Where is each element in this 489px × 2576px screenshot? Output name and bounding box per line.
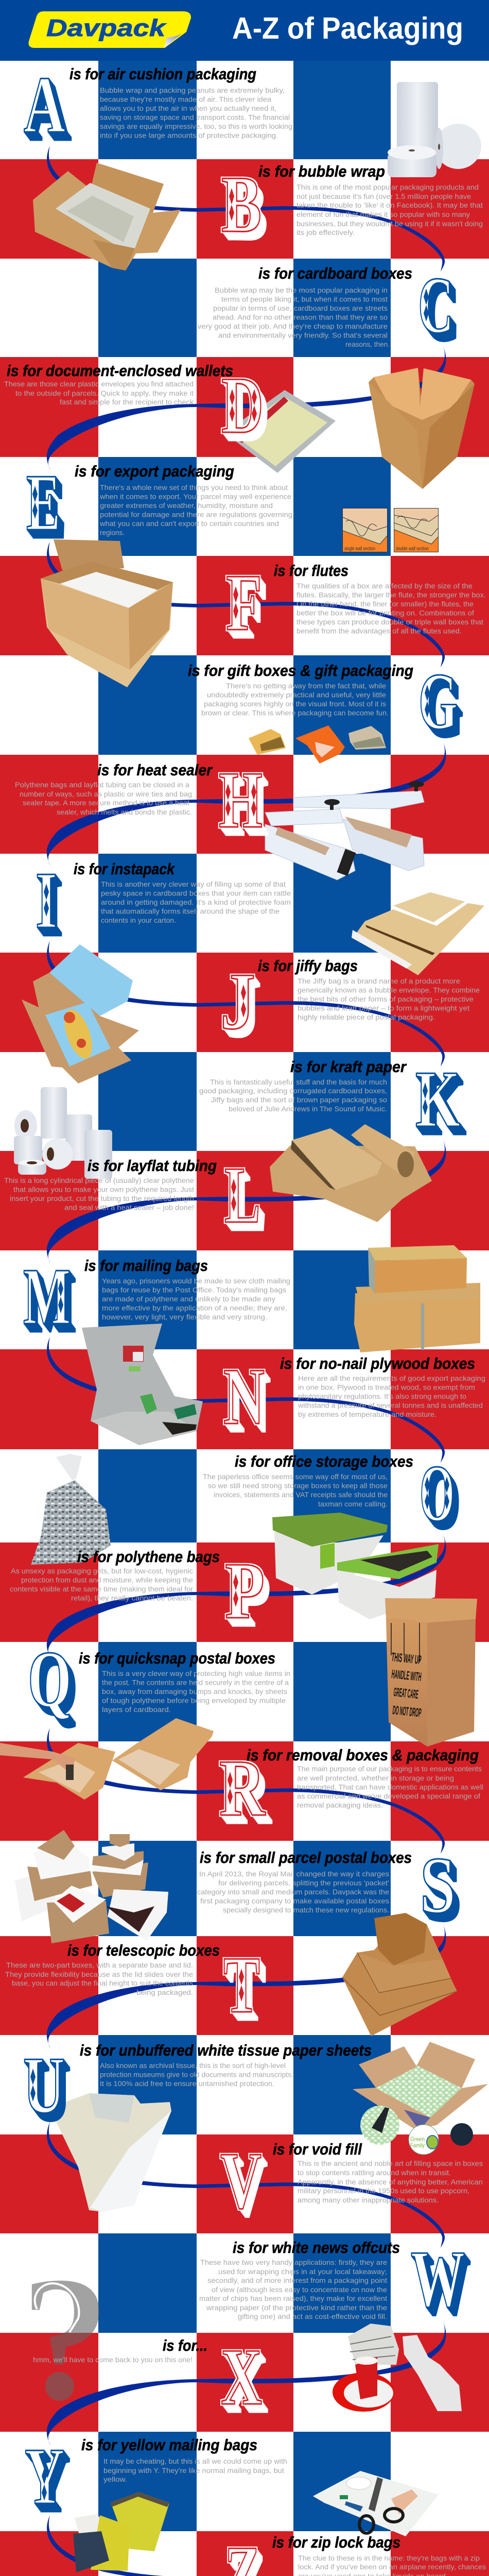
body text: to stop contents rattling around when in transit. xyxy=(298,2168,451,2177)
body text: that allows you to make your own polythene bags. Just xyxy=(13,1185,194,1193)
body text: protection museums give to old documents and manuscripts. xyxy=(100,2070,293,2078)
letter A: A xyxy=(24,60,65,149)
inset: bottle in peanuts xyxy=(360,2106,399,2145)
body text: protection from dust and moisture, while keeping the xyxy=(21,1575,193,1584)
body text: of view (although less easy to concentrate on now the xyxy=(212,2285,387,2294)
body text: good packaging, including corrugated cardboard boxes, xyxy=(199,1087,387,1095)
body text: bubbles and kraft paper – to form a lightweight yet xyxy=(298,1004,469,1012)
letter G: G xyxy=(418,656,458,746)
body text: into if you use large amounts of protective packaging. xyxy=(100,131,278,139)
section U: unbuffered white tissue paper xyxy=(23,2040,372,2212)
body text: hmm, we'll have to come back to you on this one! xyxy=(33,2355,193,2364)
body text: brown or clear. This is where packaging can become fun. xyxy=(201,709,389,717)
section Y: yellow mailing bags xyxy=(25,2431,287,2572)
body text: secondly, and of more interest from a packaging point xyxy=(207,2276,387,2284)
image: paper wads and red mug xyxy=(333,2324,462,2412)
body text: are well protected, whether in storage or being xyxy=(297,1774,454,1782)
body text xyxy=(101,880,291,924)
letter R: R xyxy=(219,1743,266,1833)
body text: beginning with Y. They're like normal mailing bags, but xyxy=(103,2466,284,2475)
body text: This is one of the most popular packaging products and xyxy=(296,183,479,191)
body text: saving on storage space and transport costs. The financial xyxy=(100,113,290,122)
letter L: L xyxy=(224,1150,260,1240)
letter L xyxy=(224,1150,260,1240)
body text: base, you can adjust the final height to suit the contents xyxy=(12,1979,193,1987)
body text xyxy=(201,682,389,717)
body text: Years ago, prisoners would be made to sew cloth mailing xyxy=(102,1277,290,1285)
image: heat sealers xyxy=(265,781,424,880)
body text: They provide flexibility because as the lid slides over the xyxy=(5,1970,193,1978)
body text: by extremes of temperature and moisture. xyxy=(298,1410,436,1418)
body text: This is a long cylindrical piece of (usually) clear polythene xyxy=(4,1176,194,1184)
body text: benefit from the advantages of all the flutes used. xyxy=(296,626,462,635)
body text xyxy=(103,2457,287,2483)
inset: dark circle xyxy=(450,2123,473,2146)
letter P: P xyxy=(225,1546,265,1635)
swoosh M to O xyxy=(47,1337,445,1463)
heading: is for heat sealer xyxy=(97,761,213,779)
logo: Davpack: Davpack xyxy=(46,14,167,41)
heading: is for office storage boxes xyxy=(235,1452,413,1470)
body text: This is fantastically useful stuff and the basis for much xyxy=(210,1078,387,1086)
image: document wallet xyxy=(224,390,336,473)
heading: is for quicksnap postal boxes xyxy=(79,1649,275,1667)
heading: is for small parcel postal boxes xyxy=(200,1849,412,1867)
body text xyxy=(296,183,483,236)
body text: more effective by the application of a needle; they are, xyxy=(102,1303,287,1312)
body text: what you can and can't export to certain countries and xyxy=(99,519,279,528)
body text: invoices, statements and VAT receipts safe should the xyxy=(214,1490,388,1499)
body text xyxy=(203,1472,388,1508)
heading: is for layflat tubing xyxy=(88,1157,217,1175)
body text: regions. xyxy=(100,529,125,537)
body text: gifting one) and act as cost-effective void fill. xyxy=(238,2312,387,2320)
body text: matter of chips has been raised), they make for excellent xyxy=(199,2294,387,2302)
inset: Green Family badge xyxy=(409,2125,439,2155)
body text: very good at their job. And they're cheap to manufacture xyxy=(198,322,388,330)
body text: undoubtedly extremely practical and useful, very little xyxy=(207,690,386,699)
section R: removal boxes and packaging xyxy=(0,1718,483,1833)
letter X: X xyxy=(221,2332,262,2421)
swoosh A to C xyxy=(47,146,445,272)
letter I xyxy=(36,855,57,945)
body text xyxy=(4,1176,194,1212)
body text: It is 100% acid free to ensure untarnished protection. xyxy=(100,2079,274,2088)
body text: and seal with a heat sealer – job done! xyxy=(64,1204,194,1212)
body text xyxy=(298,977,480,1021)
body text xyxy=(99,483,292,537)
image: kraft paper rolls xyxy=(270,1124,432,1222)
heading: is for air cushion packaging xyxy=(69,65,256,83)
body text: these types can produce double or triple wall boxes that xyxy=(296,618,483,626)
body text: the best bits of other forms of packaging – protective xyxy=(298,995,474,1003)
section W: white news offcuts xyxy=(199,2234,465,2412)
body text: terms of people liking it, but when it comes to most xyxy=(221,295,388,303)
section A: air cushion packaging xyxy=(24,60,292,270)
diagram: double wall section: double wall section xyxy=(396,546,429,552)
body text xyxy=(199,1078,387,1113)
body text: are made of polythene and unlikely to be made any xyxy=(102,1295,275,1303)
body text: withstand a pressure of several tonnes and is unaffected xyxy=(298,1401,483,1410)
letter M: M xyxy=(23,1251,71,1341)
section P: polythene bags xyxy=(10,1454,265,1635)
body text: element of fun that makes it so popular with so many xyxy=(296,210,470,218)
body text: sealer tape. A more secure method is to use a heat xyxy=(23,799,189,807)
body text xyxy=(198,286,390,348)
swoosh U to W xyxy=(47,2122,445,2248)
body text: removal packaging ideas. xyxy=(297,1801,383,1809)
body text: potential for damage and there are regulations governing xyxy=(100,510,292,518)
body text: ahead. And for no other reason than that they are so xyxy=(213,313,388,321)
section X xyxy=(21,2240,262,2437)
image: postal boxes with hand xyxy=(0,1718,214,1800)
body text: On the other hand, the finer (or smaller) the flutes, the xyxy=(296,600,474,608)
body text: contents visible at the same time (making them ideal for xyxy=(10,1585,193,1593)
body text: insert your product, cut the tubing to the required length xyxy=(10,1194,194,1202)
body text: used for wrapping chips in at your local takeaway; xyxy=(218,2267,387,2276)
body text: transported. That can have domestic applications as well xyxy=(297,1783,483,1791)
body text: its job effectively. xyxy=(296,228,355,236)
heading: is for cardboard boxes xyxy=(258,264,412,282)
letter Y: Y xyxy=(25,2431,64,2521)
letter F: F xyxy=(226,557,262,647)
body text: This is another very clever way of filling up some of that xyxy=(101,880,286,888)
body text xyxy=(5,1961,193,1996)
letter V: V xyxy=(220,2136,261,2225)
swoosh O to Q xyxy=(47,1533,446,1658)
swoosh W to Y xyxy=(47,2320,446,2446)
diagram: single wall section: single wall section xyxy=(344,546,375,552)
body text: however, very light, very flexible and very strong. xyxy=(102,1313,267,1321)
section M: mailing bags xyxy=(23,1251,290,1445)
body text: As unsexy as packaging gets, but for low-cost, hygienic xyxy=(11,1567,193,1575)
section H: heat sealer xyxy=(15,755,424,880)
letter H xyxy=(219,755,263,844)
section K: kraft paper xyxy=(199,1054,460,1222)
diagram: single wall section xyxy=(343,508,387,552)
image: plywood crates xyxy=(354,1245,480,1352)
body text: lock. And if you've been on an airplane recently, chances xyxy=(298,2563,486,2571)
letter T: T xyxy=(223,1940,260,2029)
inset: Green Family badge: Family xyxy=(410,2142,425,2149)
body text: in one box. Plywood is treated wood, so exempt from xyxy=(298,1383,475,1391)
heading: is for jiffy bags xyxy=(258,957,358,975)
letter C: C xyxy=(418,260,453,350)
header band xyxy=(0,0,489,61)
swoosh G to I xyxy=(47,741,446,866)
section N: no-nail plywood boxes xyxy=(223,1245,485,1441)
letter S: S xyxy=(420,1840,456,1930)
section E: export packaging xyxy=(26,457,292,687)
body text: These are those clear plastic envelopes you find attached xyxy=(4,380,194,388)
body text: businesses, but they wouldn't be using it if it wasn't doing xyxy=(296,219,483,228)
heading: is for export packaging xyxy=(75,462,234,480)
image: export box on pallet xyxy=(41,539,173,687)
body text: Also known as archival tissue, this is the sort of high-level xyxy=(100,2061,286,2070)
body text: The clue to these is in the name: they're bags with a zip xyxy=(298,2554,480,2562)
image: telescopic box stack xyxy=(342,1913,457,2036)
body text: highly reliable piece of postal packaging. xyxy=(298,1013,435,1021)
image: box of packing peanuts xyxy=(353,2042,488,2155)
body text: This is a very clever way of protecting high value items in xyxy=(102,1669,290,1677)
section S: small parcel postal boxes xyxy=(15,1830,456,1943)
section G: gift boxes and packaging xyxy=(188,656,458,764)
body text: around in getting damaged. It's a kind of protective foam xyxy=(101,898,291,906)
heading: is for instapack xyxy=(74,860,176,878)
swoosh S to U xyxy=(47,1923,446,2048)
section B: bubble wrap xyxy=(221,82,483,249)
body text: There's no getting away from the fact that, while xyxy=(226,682,386,690)
logo: Davpack xyxy=(29,11,191,48)
body text: The main purpose of our packaging is to ensure contents xyxy=(297,1765,482,1773)
section T: telescopic boxes xyxy=(5,1913,457,2036)
section J: jiffy bags xyxy=(220,892,484,1046)
body text: packaging scores highly on the visual front. Most of it is xyxy=(204,700,386,708)
body text: Bubble wrap may be the most popular packaging in xyxy=(215,286,388,294)
heading: is for void fill xyxy=(273,2140,362,2158)
body text: the post. The contents are held securely in the centre of a xyxy=(102,1679,289,1687)
body text: There's a whole new set of things you need to think about xyxy=(100,483,288,492)
image: open cardboard box xyxy=(369,368,475,489)
section O: office storage boxes xyxy=(203,1448,455,1619)
letter Y xyxy=(25,2431,64,2521)
heading: is for yellow mailing bags xyxy=(81,2436,257,2454)
icon: large grey question mark: ? xyxy=(21,2240,110,2437)
body text: because they're mostly made of air. This clever idea xyxy=(100,95,271,103)
body text: being packaged. xyxy=(136,1988,193,1996)
letter K: K xyxy=(415,1054,460,1144)
body text: not just because it's fun (over 1.5 million people have xyxy=(296,192,471,200)
image: layflat tubing rolls xyxy=(14,1087,112,1179)
body text: when it comes to export. Your parcel may well experience xyxy=(99,493,291,501)
body text: savings are equally impressive, too, so this is worth looking xyxy=(100,122,292,130)
image: jiffy bags xyxy=(352,892,484,975)
heading: is for document-enclosed wallets xyxy=(7,362,233,380)
swoosh Y to Z xyxy=(47,2515,242,2576)
body text: contents in your carton. xyxy=(101,916,176,924)
image: tall carton with handling marks: GREAT CARE xyxy=(393,1685,419,1702)
diagram: double wall section xyxy=(394,508,439,552)
body text: Jiffy bags and the sort of brown paper packaging so xyxy=(211,1095,387,1104)
swoosh C to E xyxy=(47,345,446,470)
image: mailing bags xyxy=(82,1324,203,1445)
body text xyxy=(4,380,196,406)
body text: yellow. xyxy=(103,2475,127,2483)
body text: popular in terms of use, cardboard boxes are streets xyxy=(213,304,388,312)
swoosh E to G xyxy=(47,541,445,667)
heading: is for... xyxy=(163,2336,207,2354)
letter G xyxy=(418,656,458,746)
body text: and environmentally very friendly. So that's several xyxy=(218,331,388,339)
letter E xyxy=(26,457,60,547)
image: box with air cushions xyxy=(33,163,181,270)
body text: The qualities of a box are affected by the size of the xyxy=(296,582,473,590)
body text: sealer, which melts and bonds the plastic. xyxy=(57,808,192,816)
body text: layers of cardboard. xyxy=(102,1705,171,1714)
body text: retail), they really cannot be beaten. xyxy=(71,1594,193,1602)
body text: These are two-part boxes, with a separate base and lid. xyxy=(6,1961,193,1969)
body text: generically known as a bubble envelope. They combine xyxy=(298,986,480,994)
heading: is for mailing bags xyxy=(84,1257,208,1275)
image: yellow mailing bags xyxy=(73,2492,169,2572)
body text: In April 2013, the Royal Mail changed the way it charges xyxy=(199,1870,389,1878)
body text: The paperless office seems some way off for most of us, xyxy=(203,1472,388,1481)
swoosh I to K xyxy=(47,941,445,1066)
body text: These have two very handy applications: firstly, they are xyxy=(200,2258,387,2266)
body text: to the outside of parcels. Quick to apply, they make it xyxy=(15,389,194,397)
body text xyxy=(100,2061,293,2088)
body text: pesky space in cardboard boxes that your item can rattle xyxy=(101,889,291,897)
body text: specially designed to match these new regulations. xyxy=(223,1906,389,1914)
body text: number of ways, such as plastic or wire ties and bag xyxy=(20,790,192,798)
title: A-Z of Packaging xyxy=(232,11,463,45)
heading: is for telescopic boxes xyxy=(67,1941,220,1959)
section Q: quicksnap postal boxes xyxy=(28,1598,477,1747)
body text xyxy=(298,2159,483,2204)
letter H: H xyxy=(219,755,263,844)
letter I: I xyxy=(36,855,57,945)
body text: Here are all the requirements of good export packaging xyxy=(298,1374,485,1382)
image: stack of small postal boxes xyxy=(15,1830,168,1943)
body text: greater extremes of weather, humidity, moisture and xyxy=(100,501,273,510)
body text xyxy=(296,582,486,635)
letter Q: Q xyxy=(28,1634,72,1724)
image: polythene bag of clips xyxy=(31,1454,111,1565)
image: tall carton with handling marks: DO NOT DROP xyxy=(392,1703,422,1720)
heading: is for bubble wrap xyxy=(258,162,385,180)
body text: of tough polythene before being enveloped by multiple xyxy=(102,1696,286,1704)
body text xyxy=(15,781,192,816)
heading: is for gift boxes & gift packaging xyxy=(188,662,413,680)
letter O: O xyxy=(420,1448,455,1538)
body text xyxy=(298,1374,485,1418)
image: flute cross-section diagrams xyxy=(343,508,439,552)
inset: Green Family badge: Green xyxy=(410,2136,425,2143)
body text: wrapping paper (of the protective kind rather than the xyxy=(206,2303,387,2312)
heading: is for polythene bags xyxy=(77,1548,220,1566)
image: tall carton with handling marks: HANDLE WITH xyxy=(391,1667,422,1684)
heading: is for kraft paper xyxy=(290,1058,407,1076)
body text: category into small and medium parcels. Davpack was the xyxy=(197,1888,389,1896)
body text: It may be cheating, but this is all we could come up with xyxy=(103,2457,287,2465)
section C: cardboard boxes xyxy=(198,260,475,489)
image: tissue-wrapped vase xyxy=(56,2093,171,2212)
body text: taxman come calling. xyxy=(318,1500,388,1508)
heading: is for white news offcuts xyxy=(233,2239,400,2257)
body text xyxy=(102,1669,290,1714)
body text xyxy=(100,86,292,139)
letter D: D xyxy=(221,360,264,450)
body text xyxy=(197,1870,389,1914)
letter M xyxy=(23,1251,71,1341)
image: tall carton with handling marks xyxy=(385,1598,477,1747)
swoosh K to M xyxy=(47,1139,446,1264)
section F: flutes xyxy=(226,508,486,647)
image: bubble wrap rolls xyxy=(388,82,481,177)
body text: reasons, then. xyxy=(345,340,390,348)
body text: that automatically forms itself around the shape of the xyxy=(101,907,280,915)
body text: fast and simple for the recipient to check. xyxy=(60,398,196,406)
body text: military personnel in the 1950s used to use popcorn, xyxy=(298,2187,469,2195)
letter C xyxy=(418,260,453,350)
body text: taken the trouble to ‘like’ it on Facebook). It may be that xyxy=(296,201,483,209)
letter J: J xyxy=(220,956,255,1046)
body text: Polythene bags and layflat tubing can be closed in a xyxy=(15,781,189,789)
letter B: B xyxy=(221,159,261,249)
letter T xyxy=(223,1940,260,2029)
image: box with foam and vase xyxy=(22,944,139,1083)
image: tall carton with handling marks: THIS WAY UP xyxy=(391,1650,422,1667)
body text: box, away from damaging bumps and knocks, by sheets xyxy=(102,1687,287,1696)
body text xyxy=(102,1277,290,1321)
body text: beloved of Julie Andrews in The Sound of Music. xyxy=(229,1105,387,1113)
section I: instapack xyxy=(22,855,291,1083)
body text: Apparently, in the absence of anything better, American xyxy=(298,2178,483,2186)
body text: bags for reuse by the Post Office. Today's mailing bags xyxy=(102,1286,286,1294)
heading: is for no-nail plywood boxes xyxy=(280,1354,475,1372)
section D: document-enclosed wallets xyxy=(4,360,336,473)
section L: layflat tubing xyxy=(4,1087,260,1240)
image: office storage boxes xyxy=(272,1513,439,1619)
body text xyxy=(199,2258,387,2320)
body text: The Jiffy bag is a brand name of a product more xyxy=(298,977,460,985)
body text: better the box will be for printing on. Combinations of xyxy=(296,609,474,617)
body text: so we still need strong storage boxes to keep all those xyxy=(208,1482,388,1490)
letter E: E xyxy=(26,457,60,547)
body text: flutes. Basically, the larger the flute, the stronger the box. xyxy=(296,590,486,599)
letter U: U xyxy=(23,2040,65,2130)
body text: phytosanitary regulations. It's also strong enough to xyxy=(298,1392,466,1400)
body text: Bubble wrap and packing peanuts are extremely bulky, xyxy=(100,86,285,94)
body text xyxy=(297,1765,483,1809)
body text xyxy=(298,2554,486,2576)
section Z: zip lock bags xyxy=(224,2471,486,2576)
body text: first packaging company to make available postal boxes xyxy=(200,1897,389,1905)
letter N: N xyxy=(223,1351,265,1441)
image: zip lock bag with first aid kit xyxy=(313,2471,439,2536)
section V: void fill xyxy=(220,2042,488,2225)
body text: for delivering parcels, splitting the previous 'packet' xyxy=(218,1878,389,1887)
body text: as commercial and we've developed a special range of xyxy=(297,1792,480,1800)
heading: is for flutes xyxy=(274,562,348,580)
body text xyxy=(10,1567,193,1602)
heading: is for zip lock bags xyxy=(272,2533,400,2551)
swoosh Q to S xyxy=(47,1728,445,1854)
heading: is for unbuffered white tissue paper sheets xyxy=(80,2041,372,2059)
letter O xyxy=(420,1448,455,1538)
body text: This is the ancient and noble art of filling space in boxes xyxy=(298,2159,483,2167)
body text: allows you to put the air in when you actually need it, xyxy=(100,104,276,112)
body text: among many other inappropriate solutions. xyxy=(298,2196,439,2204)
image: gift boxes xyxy=(249,725,386,764)
